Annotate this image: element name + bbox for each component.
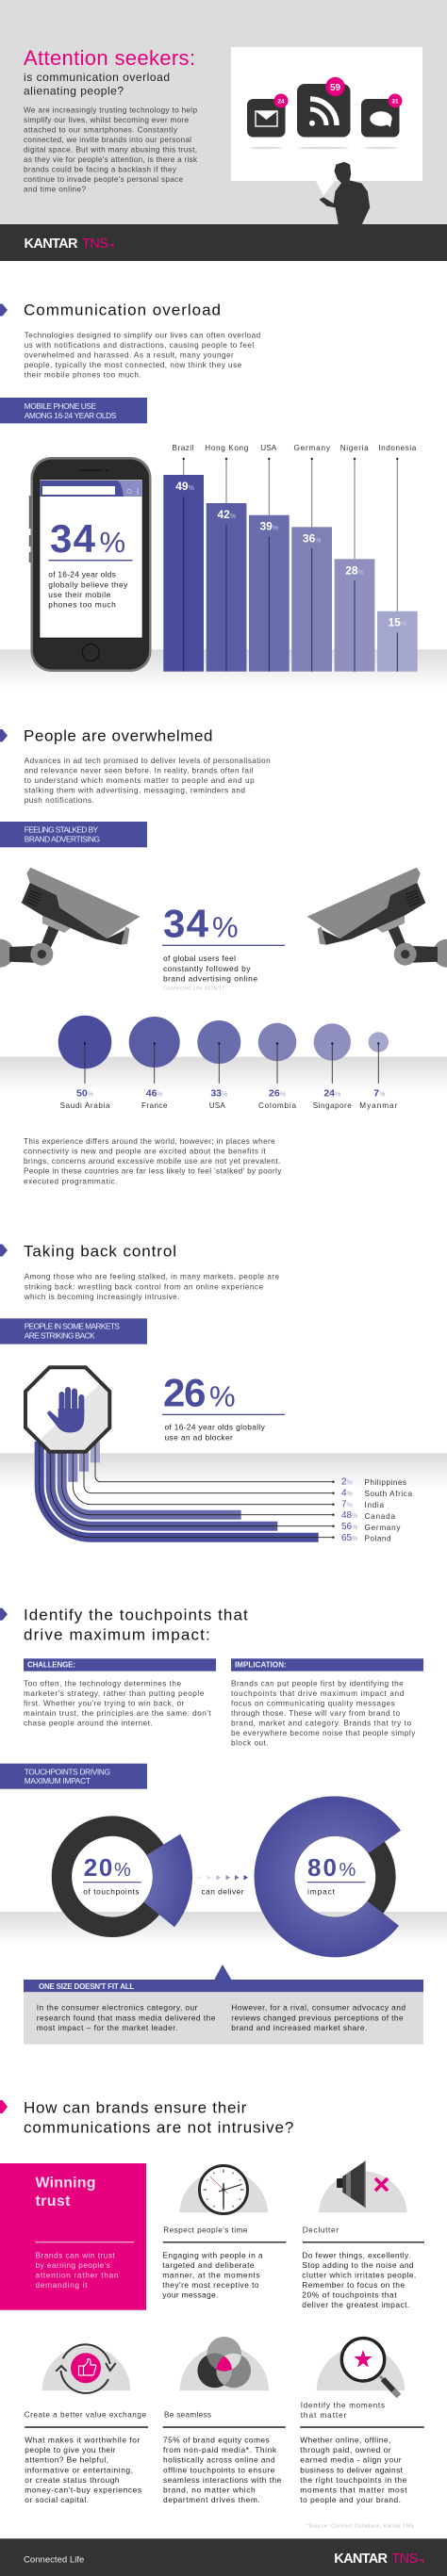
callout: one size doesn't fit all: However, for a rival, consumer advocacy and [231,2003,406,2013]
card: declutter: clutter which irritates people. [302,2271,416,2280]
card: identify the moments: to people and your brand. [300,2495,401,2504]
stat: 34% [48,516,132,609]
body text: people, typically the most connected, now think they use [25,361,242,369]
label bar: MAXIMUM IMPACT [25,1776,91,1785]
body text: their mobile phones too much. [25,371,141,379]
heading: How can brands ensure their [24,2098,247,2116]
card: identify the moments: earned media - align your [300,2455,402,2465]
card: be seamless: seamless interactions with the [163,2475,282,2485]
label bar [0,822,147,847]
heading [24,2098,293,2136]
icon: section arrow [0,2100,8,2113]
card: be seamless: holistically across online and [163,2455,275,2465]
speech bubble [231,47,422,196]
heading: drive maximum impact: [24,1626,210,1644]
card: value exchange: people to give you their [25,2445,116,2454]
chart: ad blocker use by market: India [364,1501,384,1509]
bubble chart: feeling stalked by country: USA [209,1101,225,1110]
body text [25,757,271,805]
card: identify the moments: through paid, owned or [300,2445,391,2454]
bubble chart: feeling stalked by country: 46% [146,1087,163,1099]
label bar [0,1764,147,1789]
intro text: connected, we invite brands into our personal [24,136,191,144]
footer bar: Connected Life [24,2554,84,2565]
label bar: AMONG 16-24 YEAR OLDS [25,411,117,420]
bar chart: mobile phone use: 15% [389,616,406,629]
label bar [0,1318,147,1345]
stat: 34%: use their mobile [48,590,111,599]
chart: ad blocker use by market: Poland [364,1535,391,1543]
bar chart: mobile phone use [163,444,418,672]
callout: one size doesn't fit all: ONE SIZE DOESN'T FIT ALL [39,1982,134,1991]
stat: 34%: 34 [50,516,96,561]
panel: challenge: first. Whether you're trying to win back, or [24,1700,185,1707]
footer bar: TNS [391,2552,418,2567]
card: value exchange: What makes it worthwhile for [25,2436,141,2445]
chart: 20% donut [61,1826,192,1927]
panel: header [0,0,447,261]
card: value exchange: or social capital. [25,2495,89,2504]
icon: magnifier with star [317,2339,405,2396]
body text: executed programmatic. [24,1178,117,1185]
panel: challenge: maintain trust, the principles are the same: don't [24,1709,211,1718]
bar chart: mobile phone use: USA [260,444,277,452]
card: respect people's time: they're most receptive to [162,2280,259,2290]
panel: winning trust: trust [36,2193,71,2209]
bubble chart: feeling stalked by country: 24% [323,1087,340,1099]
body text: and relevance never seen before. In reality, brands often fail [25,767,254,774]
panel: winning trust: attention rather than [36,2271,119,2280]
intro text: We are increasingly trusting technology to help [24,106,197,115]
panel: winning trust: by earning people's [36,2260,110,2270]
bubble chart: feeling stalked by country: 50% [76,1087,93,1099]
card: be seamless: brand, no matter which [163,2485,256,2494]
bubble chart: feeling stalked by country: Singapore [313,1101,352,1110]
source note: *Source: Connect Database, Kantar TNS [306,2524,414,2530]
callout: one size doesn't fit all [24,1965,423,2045]
panel: implication: block out. [231,1739,269,1747]
chart: 80% donut: % [339,1860,356,1881]
intro text: continue to invade people's personal space [24,175,183,184]
callout: one size doesn't fit all: brand and increased market share. [231,2023,367,2032]
panel: challenge [24,1658,216,1728]
panel: winning trust: Winning [36,2176,96,2192]
icon: section arrow [0,303,8,317]
panel: winning trust [0,2163,146,2310]
card: be seamless: from non-paid media*. Think [163,2445,277,2454]
icon: chat: 31 [391,98,399,106]
chart: 20% donut: 20 [84,1853,112,1882]
card: be seamless: department drives them. [163,2495,260,2504]
card: identify the moments: moments that matter most [300,2485,407,2494]
callout: one size doesn't fit all: most impact – for the market leader. [37,2023,177,2032]
callout: one size doesn't fit all: reviews changed previous perceptions of the [231,2013,404,2022]
bar chart: mobile phone use: 36% [303,531,321,545]
brand bar [0,224,447,261]
chart: ad blocker use by market [40,1442,412,1543]
body text: People in these countries are far less likely to feel 'stalked' by poorly [24,1167,282,1176]
card: declutter [302,2160,424,2309]
card: declutter: Remember to focus on the [302,2280,405,2290]
arrows: can deliver [198,1875,248,1897]
intro text: as they vie for people's attention, is there a risk [24,155,198,164]
callout: one size doesn't fit all: research found that mass media delivered the [37,2013,216,2022]
stat: 34%: phones too much [48,599,116,609]
card: value exchange: attention? Be helpful, [25,2455,108,2465]
bubble chart: feeling stalked by country: 33% [210,1087,227,1099]
card: declutter: Stop adding to the noise and [302,2260,414,2270]
icon: person with phone [320,162,370,224]
panel: implication [231,1658,423,1747]
label bar: TOUCHPOINTS DRIVING [25,1767,110,1776]
intro text: simplify our lives, whilst becoming ever more [24,116,189,124]
chart: 80% donut [255,1796,401,1957]
icon: phone [29,457,151,672]
card: value exchange: informative or entertaining, [25,2465,133,2474]
label bar: ARE STRIKING BACK [25,1331,95,1341]
stat: 34%: of global users feel [163,954,236,963]
panel: implication: focus on communicating quality messages [231,1700,395,1707]
body text: Among those who are feeling stalked, in many markets, people are [25,1273,279,1281]
chart: 80% donut: impact [307,1887,336,1897]
brand bar: KANTAR [25,236,78,252]
body text [24,1137,282,1185]
card: declutter: deliver the greatest impact. [302,2300,409,2309]
stat: 34%: brand advertising online [163,974,257,984]
stat: 34%: globally believe they [48,579,128,589]
card: respect people's time [162,2165,286,2299]
icon: venn diagram [180,2337,269,2390]
heading [24,1606,248,1644]
icon: rss: 59 [330,83,340,93]
body text: striking back: wrestling back control from an online experience [25,1282,263,1291]
bar chart: mobile phone use: 42% [218,508,236,521]
label bar: BRAND ADVERTISING [25,834,100,843]
intro text: and time online? [24,185,86,194]
chart: ad blocker use by market: Canada [364,1512,395,1521]
stat: 26%: of 16-24 year olds globally [164,1423,266,1432]
chart: 80% donut: 80 [307,1853,337,1882]
panel: challenge: Too often, the technology determines the [24,1679,181,1687]
stat: 34%: % [212,910,239,943]
icon: mail: 24 [277,98,285,106]
bar chart: mobile phone use: 28% [345,563,364,577]
body text: us with notifications and distractions, causing people to feel [25,341,254,350]
section: how can brands [0,2098,447,2576]
bar chart: mobile phone use: Hong Kong [205,444,249,452]
card: identify the moments: business to deliver against [300,2465,404,2474]
bar chart: mobile phone use: 39% [260,520,278,533]
stat: 26% [162,1370,285,1442]
body text: Advances in ad tech promised to deliver levels of personalisation [25,757,271,765]
card: identify the moments: the right touchpoints in the [300,2475,407,2485]
stat: 34% [162,901,285,991]
intro text: digital space. But with many abusing this trust, [24,145,197,155]
panel: implication: IMPLICATION: [235,1660,287,1670]
bar chart: mobile phone use: 49% [175,480,194,493]
body text: This experience differs around the world, however; in places where [24,1137,275,1146]
icon: chat [361,94,402,138]
subtitle: is communication overload [24,71,170,84]
icon: stop hand octagon [25,1367,109,1452]
card: identify the moments: that matter [301,2411,347,2420]
card: declutter: Declutter [303,2225,339,2234]
icon: thumbs up cycle [42,2344,130,2393]
panel: winning trust: Brands can win trust [36,2251,115,2260]
card: value exchange: money-can't-buy experiences [25,2485,141,2494]
card: be seamless: offline touchpoints to ensure [163,2465,275,2474]
stat: 26%: 26 [163,1370,206,1414]
body text: brings, concerns around excessive mobile use are not yet prevalent. [24,1157,280,1166]
title: Attention seekers: [24,46,195,70]
panel: implication: brand, market and category. Brands that try to [231,1719,411,1728]
icon: muted speaker [319,2160,407,2212]
callout: one size doesn't fit all: In the consumer electronics category, our [37,2003,198,2013]
body text: overwhelmed and harassed. As a result, many younger [25,351,234,360]
section: people are overwhelmed [0,727,447,1185]
body text [24,1273,279,1301]
chart: ad blocker use by market: Germany [364,1524,401,1532]
chart: ad blocker use by market: 48% [341,1510,357,1521]
chart: 20% donut: % [114,1860,131,1881]
panel: challenge: chase people around the internet. [24,1719,153,1728]
bubble chart: feeling stalked by country: Colombia [258,1101,296,1110]
body text [25,331,261,379]
section: communication overload [0,302,447,688]
card: identify the moments: Whether online, offline, [300,2436,390,2445]
stat: 34%: constantly followed by [163,964,251,973]
label bar: PEOPLE IN SOME MARKETS [25,1322,120,1331]
body text: push notifications. [25,796,94,805]
chart: ad blocker use by market: 56% [341,1522,357,1532]
icon: section arrow [0,1608,8,1621]
body text: stalking them with advertising, messaging, reminders and [25,787,245,795]
chart: ad blocker use by market: South Africa [364,1490,412,1498]
icon: section arrow [0,1244,8,1257]
label bar: MOBILE PHONE USE [25,401,96,411]
heading: Identify the touchpoints that [24,1606,248,1623]
intro text: brands could be facing a backlash if they [24,166,177,173]
card: be seamless [163,2337,286,2504]
chart: ad blocker use by market: Philippines [364,1478,406,1487]
panel: implication: Brands can put people first by identifying the [231,1679,404,1687]
bubble chart: feeling stalked by country: 26% [269,1087,286,1099]
heading: communications are not intrusive? [24,2118,293,2136]
intro text: attached to our smartphones. Constantly [24,126,178,134]
stat: 34%: 34 [163,901,209,945]
body text: to understand which moments matter to people and end up [25,776,255,785]
panel: winning trust: demanding it [36,2280,88,2290]
heading: Communication overload [24,302,221,319]
intro text [24,106,198,194]
arrows: can deliver: can deliver [202,1887,244,1897]
bubble chart: feeling stalked by country [58,1016,398,1110]
card: be seamless: Be seamless [164,2410,211,2419]
icon: clock [179,2165,268,2214]
chart: ad blocker use by market: 7% [341,1499,353,1509]
icon: right camera [307,868,447,968]
card: declutter: 20% of touchpoints that [302,2290,397,2299]
card: be seamless: 75% of brand equity comes [163,2436,270,2445]
icon: rss [297,77,351,138]
bar chart: mobile phone use: Brazil [172,444,194,452]
body text: which is becoming increasingly intrusive. [24,1293,179,1301]
card: respect people's time: Respect people's time [163,2225,248,2234]
stat: 34%: of 16-24 year olds [48,570,116,579]
bar chart: mobile phone use: Nigeria [340,444,369,452]
brand bar: TNS [82,236,108,252]
card: respect people's time: your message. [162,2290,218,2299]
footer bar: KANTAR [334,2552,389,2567]
card: respect people's time: targeted and deliberate [162,2260,255,2270]
chart: 20% donut: of touchpoints [83,1887,140,1897]
bubble chart: feeling stalked by country: Saudi Arabia [60,1101,110,1110]
bubble chart: feeling stalked by country: France [141,1101,168,1110]
bubble chart: feeling stalked by country: 7% [373,1087,385,1099]
section: identify touchpoints [0,1606,447,2045]
icon: section arrow [0,729,8,742]
stat: 26%: % [209,1379,236,1412]
chart: ad blocker use by market: 2% [341,1476,353,1487]
chart: ad blocker use by market: 4% [341,1488,353,1498]
body text: connectivity is new and people are excited about the benefits it [24,1148,266,1156]
card: value exchange: or create status through [25,2475,120,2485]
label bar: FEELING STALKED BY [25,824,98,834]
subtitle: alienating people? [24,85,124,98]
stat: 34%: Connected Life 2016/17 [163,986,225,991]
panel: implication: be everywhere become noise that people simply [231,1729,416,1737]
panel: implication: touchpoints that drive maximum impact and [231,1689,405,1698]
heading: People are overwhelmed [24,727,213,745]
panel: challenge: marketer's strategy, rather than putting people [24,1689,205,1698]
panel: implication: through those. These will vary from brand to [231,1709,400,1718]
panel: challenge: CHALLENGE: [27,1660,75,1670]
bar chart: mobile phone use: Germany [293,444,331,452]
heading: Taking back control [24,1242,176,1260]
chart: ad blocker use by market: 65% [341,1533,357,1543]
card: value exchange: Create a better value exchange [25,2410,146,2419]
section: taking back control [0,1242,447,1543]
bar chart: mobile phone use: Indonesia [378,444,417,452]
card: identify the moments: Identify the moments [301,2402,385,2410]
card: declutter: Do fewer things, excellently. [302,2251,410,2260]
bubble chart: feeling stalked by country: Myanmar [359,1101,398,1110]
subtitle [24,71,170,98]
icon: mail [247,94,289,138]
label bar [0,398,147,423]
card: value exchange [25,2344,148,2504]
stat: 26%: use an ad blocker [164,1432,233,1442]
footer bar [0,2538,447,2576]
icon: left camera [0,868,140,968]
card: respect people's time: Engaging with people in a [162,2251,263,2260]
body text: Technologies designed to simplify our lives can often overload [25,331,261,339]
card: identify the moments [300,2339,424,2504]
card: respect people's time: manner, at the moments [162,2271,260,2280]
stat: 34%: % [100,526,125,559]
